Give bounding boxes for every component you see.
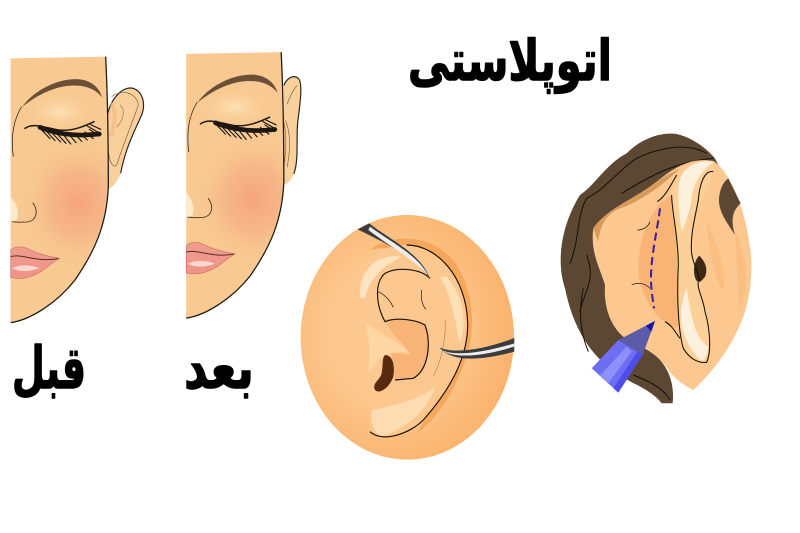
ear highlight top: [678, 161, 713, 232]
hairline: [12, 107, 22, 157]
helix highlight top: [360, 256, 402, 298]
panel: ear with surgical tools: [301, 215, 514, 460]
nose highlight: [186, 192, 193, 218]
icon: blue pencil: [592, 321, 655, 393]
face shape: [186, 52, 284, 318]
label: before: قبل: [12, 334, 86, 402]
jaw outline: [11, 57, 108, 323]
ear canal: [374, 355, 394, 391]
cheek blush: [213, 153, 283, 244]
hair strands: [570, 147, 713, 400]
brow highlight: [199, 89, 272, 125]
ear shadow rim: [370, 239, 472, 433]
lips: [186, 242, 235, 274]
icon: pinned ear: [283, 77, 301, 184]
head skin: [593, 160, 752, 390]
eyebrow: [22, 79, 102, 107]
top hook instrument: [358, 223, 430, 279]
marked skin area: [639, 195, 678, 328]
ear body: [358, 245, 468, 437]
cheek blush: [38, 157, 108, 250]
jaw outline: [186, 52, 284, 318]
hair: [561, 134, 740, 403]
brow highlight: [23, 93, 97, 130]
shaded hair edge: [593, 168, 680, 242]
panel: incision behind the ear: [561, 134, 752, 403]
hair at temple: [719, 178, 741, 235]
skin shade right: [707, 222, 746, 312]
helix highlight side: [440, 277, 464, 343]
nose highlight: [11, 197, 18, 223]
icon: protruding ear: [107, 88, 144, 188]
ear outlines: [370, 245, 468, 437]
conch: [385, 319, 428, 380]
hairline: [188, 102, 197, 152]
lips: [11, 247, 60, 278]
ear outlines: [632, 172, 713, 362]
nose line: [187, 198, 212, 218]
panel: face before surgery: [11, 57, 144, 323]
closed eye with lashes: [25, 122, 101, 144]
panel: face after surgery: [186, 52, 302, 319]
face shape: [11, 57, 108, 323]
orange circle background: [301, 215, 514, 460]
ear canal: [694, 256, 706, 282]
nose line: [12, 203, 36, 222]
bottom hook instrument: [439, 338, 514, 359]
ear pinna: [671, 162, 714, 362]
dashed incision line: [651, 208, 660, 308]
tragus highlight: [365, 322, 410, 373]
eyebrow: [197, 75, 277, 103]
earlobe highlight: [371, 387, 435, 436]
closed eye with lashes: [200, 117, 276, 139]
title: اتوپلاستی: [408, 29, 612, 94]
label: after: بعد: [184, 334, 254, 402]
ear highlight bottom: [681, 288, 708, 361]
